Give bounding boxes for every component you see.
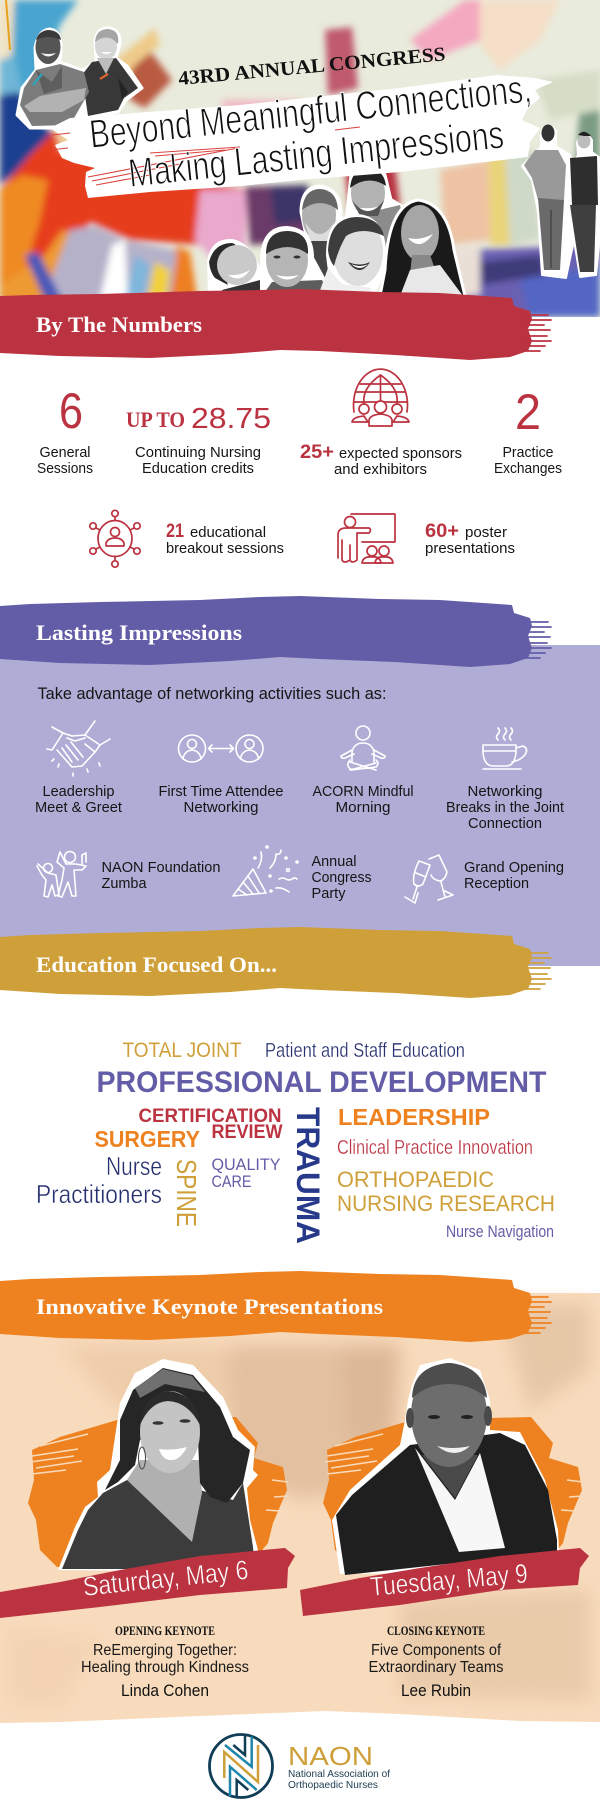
stat: up to 28.75 credits: Education credits — [142, 460, 254, 477]
word cloud: SURGERY — [94, 1126, 200, 1152]
stat: 25+ sponsors and exhibitors: 25+ — [300, 442, 334, 463]
stat: 6 general sessions: General — [40, 444, 90, 461]
icon: coffee cup — [483, 728, 527, 769]
label: First Time Attendee Networking — [158, 783, 284, 816]
photo: closing speaker — [332, 1358, 560, 1575]
label: Annual Congress Party — [312, 853, 372, 902]
ribbon: Saturday May 6 — [0, 1548, 295, 1618]
word cloud: QUALITY — [212, 1155, 280, 1174]
text: closing keynote details: Five Components of — [371, 1642, 502, 1659]
label: Annual Congress Party: Annual — [312, 853, 356, 870]
logo: NAON wordmark: Orthopaedic Nurses — [288, 1779, 378, 1791]
banner: By The Numbers: By The Numbers — [36, 312, 202, 337]
logo: NAON wordmark: National Association of — [288, 1768, 390, 1780]
stat: 60+ poster presentations — [425, 521, 515, 557]
word cloud: TRAUMA — [290, 1107, 326, 1244]
label: Grand Opening Reception: Reception — [464, 875, 529, 892]
label: ACORN Mindful Morning — [312, 783, 414, 816]
stat: up to 28.75 credits — [126, 403, 271, 477]
word cloud: PROFESSIONAL DEVELOPMENT — [96, 1066, 546, 1099]
label: Networking Breaks: Networking — [468, 783, 542, 800]
icon: network hub — [90, 510, 140, 567]
banner: Lasting Impressions: Lasting Impressions — [36, 620, 242, 645]
label: Grand Opening Reception: Grand Opening — [464, 859, 564, 876]
banner: By The Numbers — [0, 289, 551, 360]
label: Grand Opening Reception — [464, 859, 564, 892]
text: opening keynote details — [81, 1624, 249, 1700]
word cloud — [36, 1039, 555, 1244]
text: opening keynote details: Healing through Kindness — [81, 1659, 249, 1676]
text: opening keynote details: Linda Cohen — [121, 1681, 209, 1700]
hero white brush ribbon — [50, 75, 553, 198]
label: ACORN Mindful Morning: ACORN Mindful — [312, 783, 414, 800]
label: Annual Congress Party: Party — [312, 885, 346, 902]
stat: 21 breakout sessions: educational — [190, 524, 266, 541]
stat: 60+ poster presentations: 60+ — [425, 521, 459, 542]
word cloud: ORTHOPAEDIC — [337, 1167, 494, 1192]
word cloud: Clinical Practice Innovation — [337, 1137, 533, 1159]
icon: party popper — [233, 846, 298, 896]
icon: presenter with board — [338, 514, 395, 563]
stat: 21 breakout sessions — [166, 521, 284, 557]
ribbon: Saturday May 6: Saturday, May 6 — [81, 1555, 250, 1602]
intro text: networking activities: Take advantage of networking activities such as: — [38, 684, 386, 703]
stat: 6 general sessions: Sessions — [37, 460, 93, 477]
photo: opening speaker — [58, 1359, 258, 1572]
label: Leadership Meet and Greet: Leadership — [42, 783, 114, 800]
stat: up to 28.75 credits: 28.75 — [191, 403, 271, 435]
banner: Education Focused On — [0, 927, 551, 998]
hero painted background — [0, 0, 600, 317]
stat: 2 practice exchanges: 2 — [515, 384, 541, 440]
label: NAON Foundation Zumba — [102, 859, 220, 892]
icon: globe with audience — [352, 369, 409, 426]
word cloud: Nurse Navigation — [446, 1222, 554, 1241]
hero photo: two nurses top left — [17, 28, 142, 128]
label: NAON Foundation Zumba: Zumba — [102, 875, 147, 892]
stat: 21 breakout sessions: breakout sessions — [166, 540, 284, 557]
banner: Innovative Keynote Presentations: Innovative Keynote Presentations — [36, 1294, 383, 1319]
logo: NAON wordmark: NAON — [288, 1741, 373, 1771]
word cloud: Nurse — [106, 1151, 162, 1181]
title: congress name: 43RD ANNUAL CONGRESS — [177, 43, 446, 90]
stat: 2 practice exchanges — [494, 384, 562, 477]
icon: dancers — [37, 852, 86, 897]
stat: 2 practice exchanges: Exchanges — [494, 460, 562, 477]
label: Leadership Meet and Greet: Meet & Greet — [35, 799, 123, 816]
stat: 25+ sponsors and exhibitors: expected sponsors — [339, 445, 462, 462]
brush: orange behind opening speaker — [28, 1417, 288, 1567]
word cloud: CERTIFICATION — [138, 1105, 282, 1127]
label: ACORN Mindful Morning: Morning — [336, 799, 390, 816]
word cloud: LEADERSHIP — [338, 1104, 490, 1130]
label: Leadership Meet and Greet — [35, 783, 123, 816]
banner: Innovative Keynote Presentations — [0, 1271, 551, 1342]
stat: 25+ sponsors and exhibitors — [300, 442, 462, 478]
word cloud: NURSING RESEARCH — [337, 1191, 555, 1216]
text: closing keynote details: Extraordinary Teams — [368, 1659, 504, 1676]
stat: 60+ poster presentations: poster — [465, 524, 507, 541]
logo: NAON wordmark — [288, 1741, 390, 1791]
text: opening keynote details: ReEmerging Together: — [93, 1642, 237, 1659]
stat: 25+ sponsors and exhibitors: and exhibitors — [334, 461, 427, 478]
stat: 2 practice exchanges: Practice — [502, 444, 554, 461]
label: First Time Attendee Networking: Networking — [184, 799, 258, 816]
label: First Time Attendee Networking: First Time Attendee — [158, 783, 284, 800]
stat: 6 general sessions: 6 — [59, 383, 83, 439]
hero photo: two nurses walking right — [522, 124, 600, 278]
icon: connected attendees — [178, 735, 263, 762]
text: closing keynote details: Lee Rubin — [401, 1681, 471, 1700]
icon: handshake — [47, 721, 110, 776]
stat: up to 28.75 credits: Continuing Nursing — [135, 444, 261, 461]
icon: meditation figure — [341, 726, 385, 770]
ribbon: Tuesday May 9 — [300, 1548, 589, 1616]
panel: keynote background — [0, 1293, 600, 1723]
word cloud: Practitioners — [36, 1179, 162, 1209]
banner: Education Focused On: Education Focused On... — [36, 952, 277, 977]
word cloud: Patient and Staff Education — [265, 1040, 465, 1062]
label: Networking Breaks: Breaks in the Joint — [446, 799, 565, 816]
banner: Lasting Impressions — [0, 596, 551, 667]
word cloud: SPINE — [171, 1159, 202, 1227]
text: closing keynote details: CLOSING KEYNOTE — [387, 1624, 485, 1638]
word cloud: REVIEW — [212, 1121, 283, 1143]
label: NAON Foundation Zumba: NAON Foundation — [102, 859, 220, 876]
stat: 6 general sessions — [37, 383, 93, 477]
word cloud: CARE — [212, 1172, 252, 1191]
brush: orange behind closing speaker — [323, 1417, 583, 1567]
hero photo: group of smiling people — [209, 168, 465, 296]
ribbon: Tuesday May 9: Tuesday, May 9 — [369, 1558, 529, 1602]
text: opening keynote details: OPENING KEYNOTE — [115, 1624, 215, 1638]
panel: lasting impressions background — [0, 645, 600, 966]
label: Networking Breaks: Connection — [468, 815, 542, 832]
word cloud: TOTAL JOINT — [122, 1039, 242, 1062]
label: Networking Breaks — [446, 783, 565, 832]
stat: 60+ poster presentations: presentations — [425, 540, 515, 557]
stat: 21 breakout sessions: 21 — [166, 521, 184, 542]
logo: NAON emblem — [210, 1734, 272, 1798]
label: Annual Congress Party: Congress — [312, 869, 372, 886]
stat: up to 28.75 credits: UP TO — [126, 407, 185, 432]
icon: champagne glasses — [405, 855, 453, 903]
text: closing keynote details — [368, 1624, 504, 1700]
